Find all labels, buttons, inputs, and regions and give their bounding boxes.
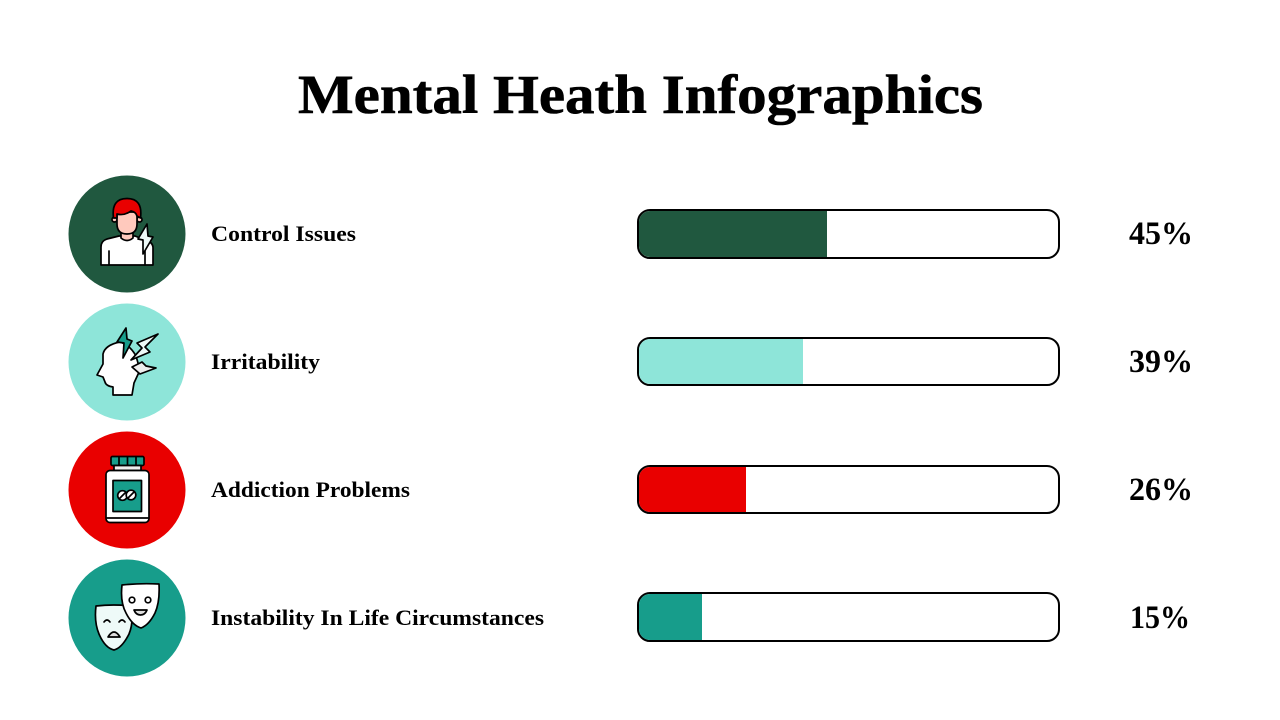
value: 15% xyxy=(1130,600,1190,636)
row: irritability xyxy=(68,304,1193,420)
progress bar: 45% xyxy=(638,210,1059,258)
icon: pill bottle xyxy=(68,432,186,548)
label: Control Issues xyxy=(211,221,356,246)
row: addiction problems xyxy=(68,432,1193,548)
icon: theatre masks xyxy=(68,560,186,676)
title: Mental Heath Infographics xyxy=(298,64,983,125)
progress bar: 39% xyxy=(638,338,1059,385)
row: control issues xyxy=(68,176,1193,292)
progress bar: 26% xyxy=(638,466,1059,513)
label: Addiction Problems xyxy=(211,477,410,502)
label: Irritability xyxy=(211,349,321,374)
value: 26% xyxy=(1129,472,1193,508)
progress bar: 15% xyxy=(638,593,1059,641)
icon: person with lightning bolt xyxy=(68,176,186,292)
value: 39% xyxy=(1129,344,1193,380)
icon: head with lightning bolts xyxy=(68,304,186,420)
row: instability in life circumstances xyxy=(68,560,1190,676)
value: 45% xyxy=(1129,216,1193,252)
label: Instability In Life Circumstances xyxy=(211,605,544,630)
